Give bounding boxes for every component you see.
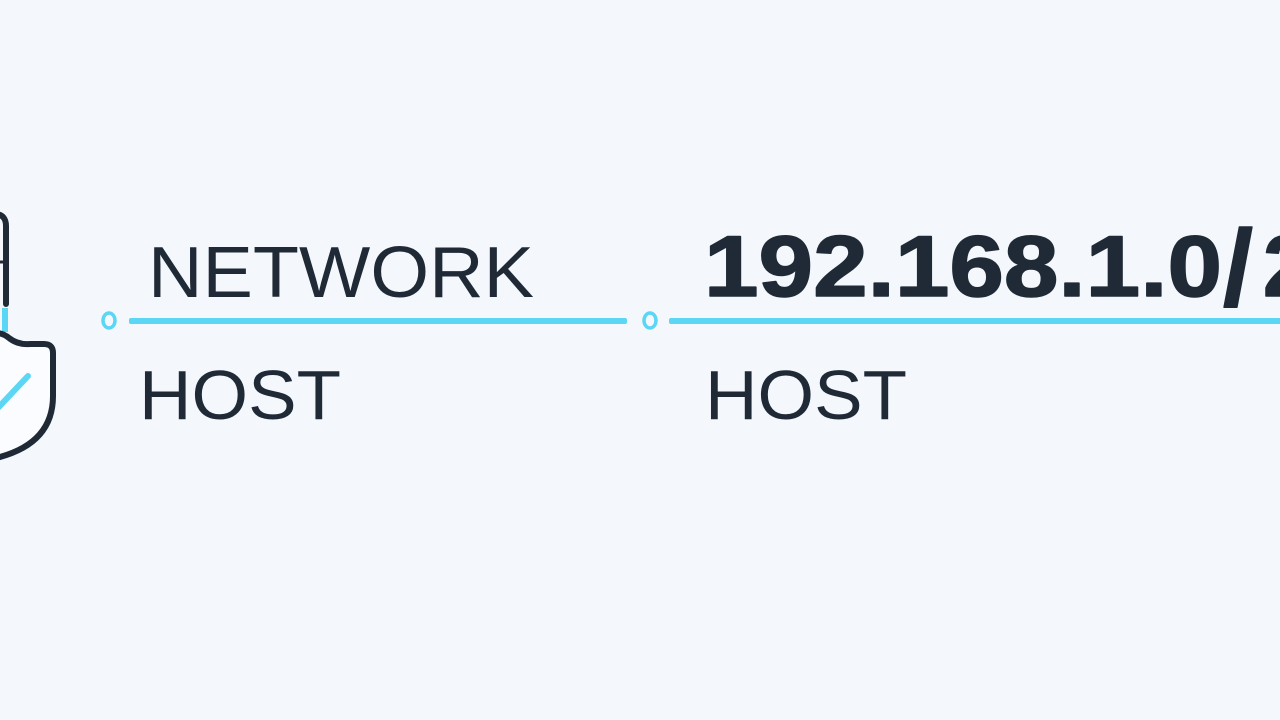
marker: first node	[103, 313, 115, 328]
line: first divider	[129, 318, 627, 324]
marker: second node	[644, 313, 656, 328]
text: address digits: 192.168.1.0	[704, 219, 1222, 315]
icon: security shield with device	[0, 214, 53, 458]
heading: network label: NETWORK	[148, 233, 534, 313]
line: second divider	[669, 318, 1280, 324]
heading: IP address	[704, 207, 1280, 328]
heading: second host label: HOST	[705, 356, 907, 434]
heading: first host label: HOST	[139, 356, 341, 434]
text: slash: /	[1223, 207, 1253, 328]
